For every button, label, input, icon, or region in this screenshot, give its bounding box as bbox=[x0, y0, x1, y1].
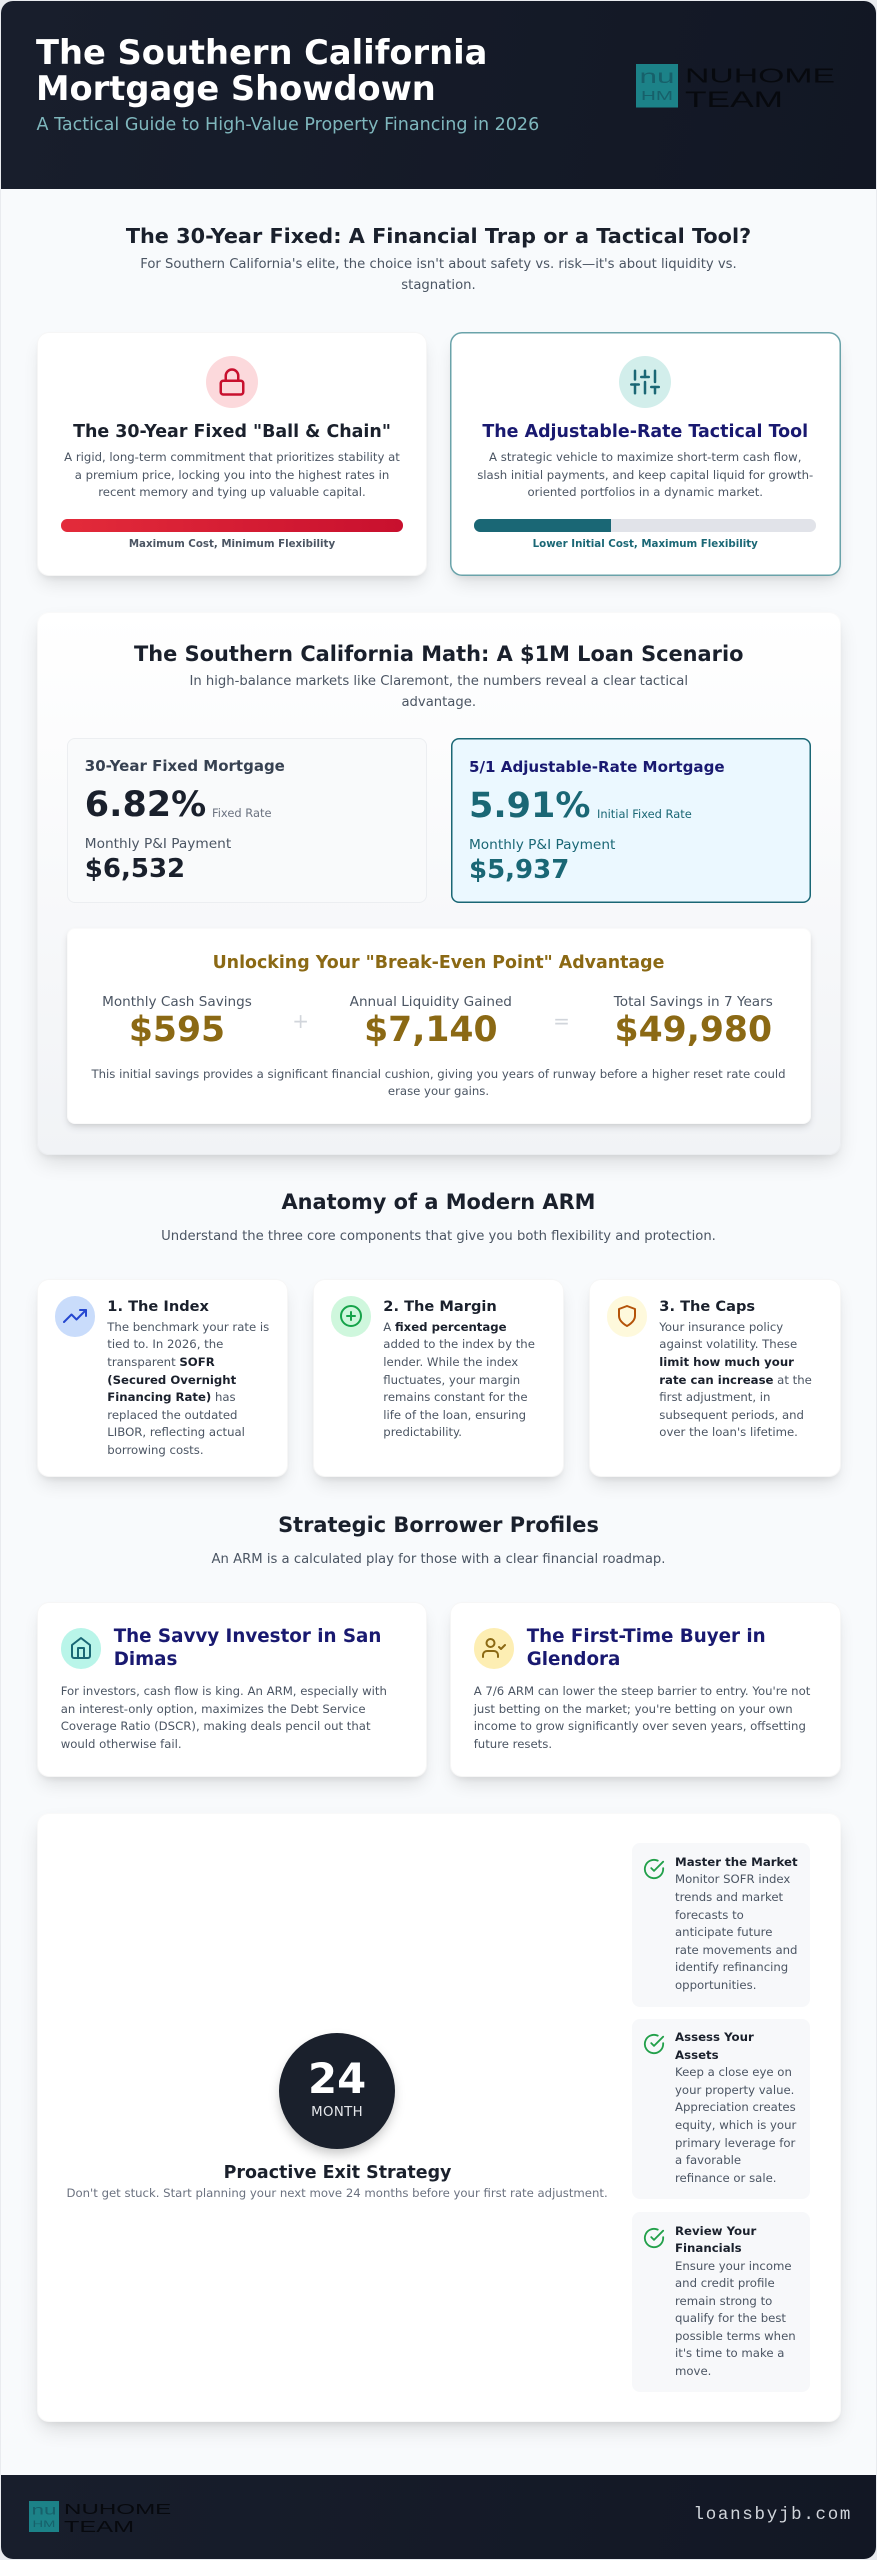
card text: LIBOR, reflecting actual bbox=[107, 1425, 245, 1439]
logo: NuHome Team bbox=[636, 64, 835, 108]
break-even note: erase your gains. bbox=[388, 1084, 489, 1098]
item text: possible terms when bbox=[675, 2329, 796, 2343]
card title bbox=[114, 1626, 381, 1670]
card title: The First-Time Buyer in bbox=[527, 1626, 766, 1646]
footer logo: HM bbox=[33, 2519, 55, 2529]
logo: NuHome Team: NUHOME bbox=[685, 66, 835, 88]
card title: 2. The Margin bbox=[383, 1298, 497, 1315]
card text: (Secured Overnight bbox=[107, 1373, 236, 1387]
card text: predictability. bbox=[383, 1425, 462, 1439]
panel: the index bbox=[37, 1279, 288, 1477]
card text: The benchmark your rate is bbox=[107, 1320, 269, 1334]
item text: anticipate future bbox=[675, 1925, 772, 1939]
card text: first adjustment, in bbox=[659, 1390, 770, 1404]
panel: 30-year fixed card bbox=[37, 332, 427, 576]
stat label: Monthly Cash Savings bbox=[102, 994, 252, 1010]
card text: borrowing costs. bbox=[107, 1443, 204, 1457]
section heading: profiles: Strategic Borrower Profiles bbox=[278, 1513, 599, 1537]
cost bar bbox=[474, 519, 816, 532]
checklist: master the market bbox=[632, 1843, 810, 2007]
card text bbox=[107, 1320, 269, 1457]
break-even title: Unlocking Your "Break-Even Point" Advantage bbox=[213, 953, 664, 973]
payment label: Monthly P&I Payment bbox=[469, 837, 615, 853]
card text: would otherwise fail. bbox=[61, 1737, 182, 1751]
card text: A 7/6 ARM can lower the steep barrier to entry. You're not bbox=[474, 1684, 810, 1698]
header band bbox=[1, 1, 876, 188]
panel: adjustable-rate card bbox=[450, 332, 840, 576]
icon: lock bbox=[206, 356, 258, 408]
checklist: assess your assets bbox=[632, 2019, 810, 2199]
item text: qualify for the best bbox=[675, 2311, 786, 2325]
card text: limit how much your bbox=[659, 1355, 794, 1369]
stat value: $7,140 bbox=[364, 1010, 498, 1050]
icon: check circle bbox=[644, 2228, 664, 2248]
panel intro: In high-balance markets like Claremont, the numbers reveal a clear tactical bbox=[189, 674, 688, 689]
icon: check circle bbox=[644, 1858, 664, 1880]
icon: plus circle bbox=[331, 1296, 371, 1337]
section intro: 30-year fixed bbox=[140, 257, 737, 293]
bar label: Maximum Cost, Minimum Flexibility bbox=[129, 538, 335, 550]
section intro: profiles: An ARM is a calculated play for those with a clear financial roadmap. bbox=[212, 1552, 666, 1567]
logo: NuHome Team: nu bbox=[640, 67, 674, 88]
cost bar bbox=[61, 519, 403, 532]
stat value: $49,980 bbox=[615, 1010, 772, 1050]
item text: identify refinancing bbox=[675, 1960, 788, 1974]
item text: Financials bbox=[675, 2241, 742, 2255]
card text bbox=[477, 450, 813, 499]
break-even note: This initial savings provides a significant financial cushion, giving you years of runway before a higher reset rate could bbox=[91, 1066, 786, 1080]
stat: seven-year total bbox=[614, 994, 773, 1050]
website: loansbyjb.com bbox=[694, 2505, 852, 2525]
card text: slash initial payments, and keep capital liquid for growth- bbox=[477, 468, 813, 482]
panel: savvy investor bbox=[37, 1602, 427, 1777]
card text: For investors, cash flow is king. An ARM, especially with bbox=[61, 1684, 387, 1698]
item text: forecasts to bbox=[675, 1908, 744, 1922]
card text bbox=[659, 1320, 812, 1439]
card text: replaced the outdated bbox=[107, 1408, 237, 1422]
card text: A rigid, long-term commitment that prioritizes stability at bbox=[64, 450, 400, 464]
card text: over the loan's lifetime. bbox=[659, 1425, 798, 1439]
card text: Coverage Ratio (DSCR), making deals pencil out that bbox=[61, 1719, 371, 1733]
panel: proactive exit strategy bbox=[37, 1813, 840, 2422]
item text: trends and market bbox=[675, 1890, 783, 1904]
badge number: 24 bbox=[308, 2054, 366, 2103]
icon: check circle bbox=[644, 2034, 664, 2054]
rate: 5.91% bbox=[469, 786, 590, 826]
stat label: Total Savings in 7 Years bbox=[614, 994, 773, 1010]
payment label: Monthly P&I Payment bbox=[85, 836, 231, 852]
card text: transparent SOFR bbox=[107, 1355, 215, 1369]
footer logo: nu bbox=[32, 2503, 57, 2518]
item text: opportunities. bbox=[675, 1978, 756, 1992]
card text: life of the loan, ensuring bbox=[383, 1408, 526, 1422]
panel intro bbox=[189, 674, 688, 710]
footer logo bbox=[29, 2501, 171, 2532]
card text: income to grow significantly over seven years, offsetting bbox=[474, 1719, 806, 1733]
item text: Monitor SOFR index bbox=[675, 1872, 790, 1886]
card title: 1. The Index bbox=[107, 1298, 209, 1315]
item text: it's time to make a bbox=[675, 2346, 784, 2360]
panel: the caps bbox=[589, 1279, 840, 1477]
mortgage name: 30-Year Fixed Mortgage bbox=[85, 757, 285, 775]
panel intro: advantage. bbox=[401, 695, 476, 710]
title bbox=[36, 33, 487, 108]
icon: user check bbox=[474, 1628, 514, 1669]
payment: $6,532 bbox=[85, 854, 185, 884]
card text bbox=[64, 450, 400, 499]
icon: shield bbox=[607, 1296, 647, 1337]
subtitle: A Tactical Guide to High-Value Property Financing in 2026 bbox=[36, 114, 539, 134]
card text: tied to. In 2026, the bbox=[107, 1337, 223, 1351]
card text: just betting on the market; you're betting on your own bbox=[474, 1702, 793, 1716]
card title: 3. The Caps bbox=[659, 1298, 755, 1315]
mortgage name: 5/1 Adjustable-Rate Mortgage bbox=[469, 758, 725, 776]
card text: remains constant for the bbox=[383, 1390, 528, 1404]
comparison: 30-year fixed mortgage bbox=[67, 738, 426, 903]
card title: Dimas bbox=[114, 1649, 177, 1670]
item text: remain strong to bbox=[675, 2294, 772, 2308]
footer logo: NUHOME bbox=[64, 2502, 171, 2518]
section heading: anatomy: Anatomy of a Modern ARM bbox=[282, 1190, 595, 1214]
logo: NuHome Team: HM bbox=[641, 88, 673, 103]
item text: your property value. bbox=[675, 2083, 794, 2097]
item text: refinance or sale. bbox=[675, 2171, 776, 2185]
card text: fluctuates, your margin bbox=[383, 1373, 520, 1387]
item text: Appreciation creates bbox=[675, 2100, 796, 2114]
section intro: 30-year fixed: For Southern California's elite, the choice isn't about safety vs. risk—it's about liquidity vs. bbox=[140, 257, 737, 272]
card text: future resets. bbox=[474, 1737, 552, 1751]
stat value: $595 bbox=[129, 1010, 225, 1050]
title: The Southern California bbox=[36, 33, 487, 72]
bar label: Lower Initial Cost, Maximum Flexibility bbox=[533, 538, 758, 550]
stat: monthly savings bbox=[102, 994, 252, 1050]
card title: Glendora bbox=[527, 1649, 620, 1670]
card title: The Savvy Investor in San bbox=[114, 1626, 381, 1646]
strategy text: Don't get stuck. Start planning your next move 24 months before your first rate adjustment. bbox=[66, 2186, 608, 2200]
panel heading: The Southern California Math: A $1M Loan Scenario bbox=[134, 642, 743, 666]
comparison: 5/1 ARM bbox=[450, 738, 810, 903]
card text bbox=[474, 1684, 810, 1751]
card text bbox=[383, 1320, 535, 1439]
checklist: review your financials bbox=[632, 2212, 810, 2392]
stat label: Annual Liquidity Gained bbox=[350, 994, 512, 1010]
panel: the margin bbox=[313, 1279, 564, 1477]
card text: A fixed percentage bbox=[383, 1320, 507, 1334]
card title bbox=[526, 1626, 766, 1670]
icon: sliders bbox=[619, 356, 671, 408]
rate label: Initial Fixed Rate bbox=[597, 807, 692, 821]
badge unit: MONTH bbox=[311, 2105, 363, 2120]
item text: Keep a close eye on bbox=[675, 2065, 792, 2079]
panel: first-time buyer bbox=[450, 1602, 840, 1777]
item text: Assets bbox=[675, 2048, 719, 2062]
card text: Your insurance policy bbox=[659, 1320, 783, 1334]
card text: added to the index by the bbox=[383, 1337, 535, 1351]
payment: $5,937 bbox=[469, 855, 569, 885]
item text bbox=[675, 2030, 796, 2185]
item text: and credit profile bbox=[675, 2276, 775, 2290]
rate label: Fixed Rate bbox=[212, 806, 272, 820]
stat: annual liquidity bbox=[350, 994, 512, 1050]
section heading: 30-year fixed: The 30-Year Fixed: A Financial Trap or a Tactical Tool? bbox=[126, 224, 751, 248]
icon: trending up bbox=[55, 1296, 95, 1337]
item text: Review Your bbox=[675, 2224, 756, 2238]
icon: home bbox=[61, 1628, 101, 1669]
break-even panel bbox=[67, 928, 810, 1124]
card text: A strategic vehicle to maximize short-term cash flow, bbox=[489, 450, 801, 464]
card title: The Adjustable-Rate Tactical Tool bbox=[482, 422, 808, 442]
card text: oriented portfolios in a dynamic market. bbox=[528, 485, 763, 499]
card title: The 30-Year Fixed "Ball & Chain" bbox=[73, 422, 391, 442]
item text bbox=[675, 2224, 796, 2378]
item text: Master the Market bbox=[675, 1855, 798, 1869]
item text: equity, which is your bbox=[675, 2118, 796, 2132]
footer band bbox=[1, 2475, 876, 2559]
rate: 6.82% bbox=[85, 785, 206, 825]
panel: $1M loan scenario bbox=[37, 612, 840, 1155]
card text: subsequent periods, and bbox=[659, 1408, 804, 1422]
item text: rate movements and bbox=[675, 1943, 797, 1957]
strategy title: Proactive Exit Strategy bbox=[224, 2163, 451, 2183]
item text: Assess Your bbox=[675, 2030, 754, 2044]
equals sign: = bbox=[553, 1009, 570, 1033]
card text: recent memory and tying up valuable capital. bbox=[98, 485, 366, 499]
item text: a favorable bbox=[675, 2153, 741, 2167]
plus sign: + bbox=[292, 1009, 309, 1033]
card text: Financing Rate) has bbox=[107, 1390, 236, 1404]
card text: lender. While the index bbox=[383, 1355, 518, 1369]
24 month badge bbox=[279, 2033, 395, 2149]
title: Mortgage Showdown bbox=[36, 69, 436, 108]
card text: an interest-only option, maximizes the Debt Service bbox=[61, 1702, 366, 1716]
item text: primary leverage for bbox=[675, 2136, 795, 2150]
break-even note bbox=[91, 1066, 786, 1098]
card text: a premium price, locking you into the highest rates in bbox=[75, 468, 389, 482]
section intro: 30-year fixed: stagnation. bbox=[401, 278, 476, 293]
card text: rate can increase at the bbox=[659, 1373, 812, 1387]
card text: against volatility. These bbox=[659, 1337, 797, 1351]
item text bbox=[675, 1855, 798, 1992]
item text: move. bbox=[675, 2364, 711, 2378]
section intro: anatomy: Understand the three core components that give you both flexibility and protection. bbox=[161, 1229, 716, 1244]
card text bbox=[61, 1684, 387, 1751]
item text: Ensure your income bbox=[675, 2259, 792, 2273]
